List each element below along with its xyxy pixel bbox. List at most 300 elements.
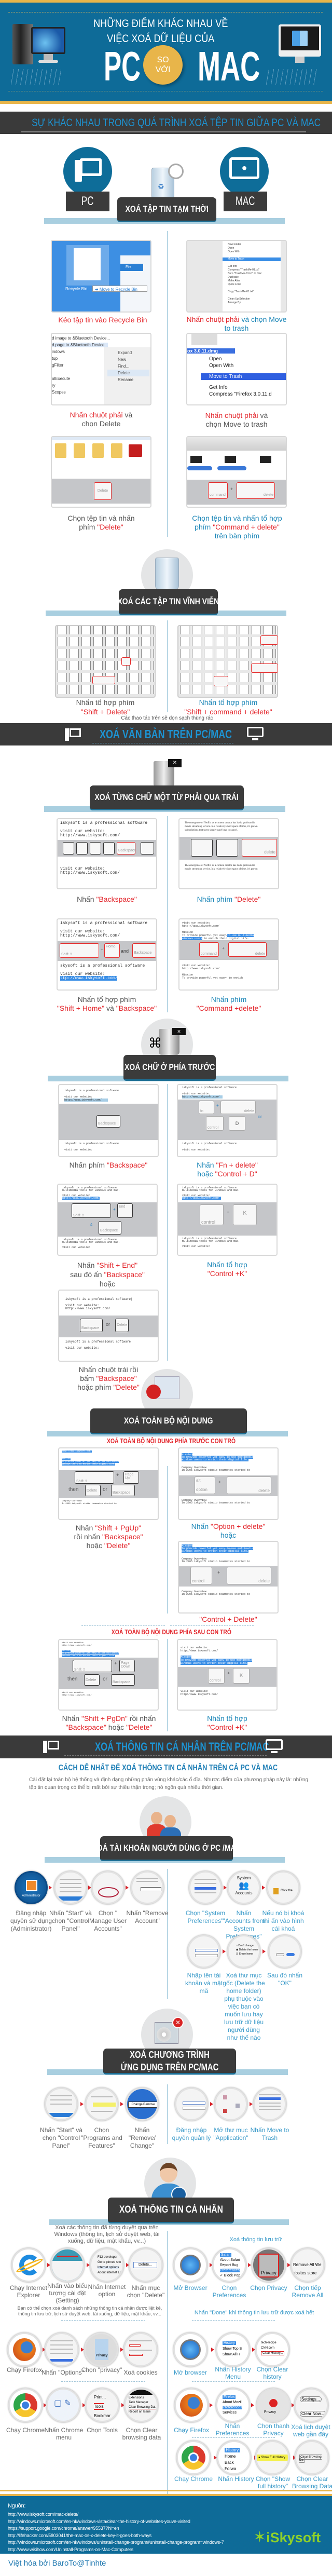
panel: control+delete: Company Overview bbox=[182, 1590, 206, 1593]
panel: control+K after bbox=[177, 1639, 278, 1711]
steps: Chrome on Mac: Chọn Clear Browsing Data bbox=[292, 2475, 332, 2490]
panel: shift+pgdn: Shift ⇧ bbox=[74, 1668, 86, 1672]
text: XOÁ CHỮ Ở PHÍA TRƯỚC bbox=[125, 1062, 215, 1072]
steps: Safari history: Show All H bbox=[223, 2353, 240, 2356]
panel: click then backspace/delete: visit our website: bbox=[65, 1304, 99, 1307]
title: MAC: MAC bbox=[198, 43, 260, 89]
heading: temporary file deletion bbox=[44, 218, 285, 224]
panel: fn+delete: + bbox=[216, 1104, 219, 1108]
panel: backspace forward: visit our website: bbox=[64, 1095, 92, 1099]
caption bbox=[76, 698, 134, 716]
text: Safari storage: Xoá thông tin lưu trữ bbox=[230, 2236, 282, 2243]
panel: control+K: multimedia tools for windows and mac. bbox=[182, 1189, 240, 1192]
steps: Chrome on PC: Chọn Clear browsing data bbox=[122, 2426, 161, 2441]
keyboard: PC bbox=[55, 625, 156, 698]
panel: click then backspace/delete: Backspace bbox=[81, 1326, 99, 1330]
caption: "Control + Delete" bbox=[199, 1615, 257, 1623]
steps: Internet Explorer: About Internet Ex bbox=[98, 2271, 121, 2274]
panel: control+K: multimedia tools for windows and mac. bbox=[182, 1240, 240, 1243]
panel: control+delete bbox=[178, 1541, 279, 1614]
steps: Chrome on PC: Task Manager bbox=[129, 2401, 148, 2404]
panel: Mac move to trash menu: Open With bbox=[228, 250, 240, 253]
caption: Nhấn tổ hợp bbox=[207, 1714, 247, 1723]
panel: shift+pgdn: http://www.iskysoft.com/ bbox=[62, 1645, 92, 1647]
steps: Mac user account: Chọn "System Preferences" bbox=[186, 1909, 225, 1924]
panel: shift+home backspace bbox=[57, 918, 157, 991]
panel: shift+pgdn: Backspace bbox=[113, 1680, 130, 1684]
steps: Internet Explorer: Nhấn vào biểu tượng cài đặt (Setting) bbox=[47, 2282, 88, 2304]
caption bbox=[77, 1365, 140, 1391]
caption bbox=[197, 1161, 258, 1178]
panel: control+K after: To provide powerful yet easy-to-use multimedia bbox=[181, 1659, 252, 1662]
panel: control+K: iskysoft is a professional software bbox=[182, 1186, 237, 1189]
panel: control+delete: control bbox=[192, 1579, 204, 1583]
steps: Chrome on PC: Tools bbox=[94, 2404, 104, 2409]
panel: PC drag to recycle bin: File bbox=[126, 265, 131, 269]
steps: Firefox on PC: Chạy Firefox bbox=[7, 2366, 42, 2374]
caption bbox=[191, 1522, 265, 1539]
subheading: after cursor: XOÁ TOÀN BỘ NỘI DUNG PHÍA SAU CON TRỎ bbox=[111, 1628, 231, 1636]
icon: trash with x: ✕ bbox=[173, 760, 177, 766]
panel: Mac move to trash menu: Copy "TrashMe-01.txt" bbox=[228, 290, 254, 293]
panel: Mac move to trash menu: Clean Up Selection bbox=[228, 297, 250, 301]
steps: Safari privacy: ebsites store bbox=[293, 2271, 316, 2275]
panel: option+delete: Company Overview bbox=[182, 1466, 206, 1469]
steps: PC uninstall: Nhấn "Remove/ Change" bbox=[129, 2126, 156, 2149]
panel: shift+pgup: or bbox=[103, 1487, 107, 1493]
icon: PC circle: PC bbox=[81, 194, 94, 208]
steps: Firefox on Mac: Chọn thanh Privacy bbox=[257, 2422, 289, 2437]
panel: PC right-click delete: Expand bbox=[118, 350, 132, 355]
panel: delete mac: subscriptions that users simply can't bear to cancel. bbox=[185, 829, 238, 832]
panel: control+K after: visit our website: bbox=[181, 1646, 209, 1649]
caption: chọn Move to trash bbox=[205, 420, 268, 428]
icon: administrator bbox=[15, 1871, 48, 1904]
logo: iSkysoft: ✶iSkysoft bbox=[253, 2529, 321, 2546]
panel: delete mac: The emergence of Netflix as a content creator has had a profound in bbox=[185, 822, 255, 824]
panel: PC right-click delete: Find... bbox=[118, 364, 129, 369]
panel: PC drag to recycle bin: Recycle Bin bbox=[65, 287, 87, 291]
caption: hoặc phím "Delete" bbox=[77, 1383, 140, 1391]
steps: Safari history: Chọn Clear history bbox=[257, 2366, 288, 2380]
caption: Nhấn "Fn + delete" bbox=[197, 1161, 258, 1169]
caption: hoặc "Control + D" bbox=[197, 1170, 257, 1178]
steps: Chrome on PC: Chọn Tools bbox=[87, 2426, 118, 2434]
text: ỨNG DỤNG TRÊN PC/MAC bbox=[121, 2062, 218, 2072]
icon: trash with x bbox=[154, 759, 182, 785]
panel: shift+end: visit our website: bbox=[62, 1246, 90, 1249]
section bar: file deletion differences bbox=[0, 112, 332, 134]
panel: shift+pgdn: or bbox=[103, 1676, 107, 1682]
panel: backspace bbox=[57, 818, 157, 889]
steps: Safari privacy: Remove All We bbox=[293, 2262, 322, 2267]
panel: fn+delete: fn bbox=[200, 1109, 203, 1113]
steps: Safari privacy: Chọn Preferences bbox=[213, 2284, 246, 2299]
panel: Mac right-click move to trash: ox 3.0.11.dmg bbox=[187, 348, 218, 354]
caption: "Command +delete" bbox=[197, 1004, 261, 1012]
panel: shift+end: multimedia tools for windows and mac. bbox=[62, 1189, 120, 1192]
panel: fn+delete: http://www.iskysoft.com/ bbox=[182, 1095, 219, 1099]
heading: uninstall programs bbox=[47, 2069, 288, 2075]
panel: shift+pgup: Page Up bbox=[125, 1473, 133, 1480]
caption: Nhấn "Shift + End" bbox=[77, 1261, 137, 1269]
steps: PC uninstall: Nhấn "Start" và chọn "Control Panel" bbox=[40, 2126, 82, 2149]
caption: Nhấn phím "Backspace" bbox=[70, 1161, 147, 1169]
steps: Firefox on PC: Chọn "privacy" bbox=[81, 2366, 122, 2374]
steps: Chrome on PC: Chạy Chrome bbox=[6, 2426, 45, 2434]
panel: command+delete: http://www.iskysoft.com/ bbox=[182, 967, 219, 970]
panel: shift+pgup bbox=[58, 1447, 159, 1520]
credit: Việt hóa bởi BaroTo@Tinhte bbox=[8, 2559, 106, 2568]
panel: control+K after: Mission bbox=[181, 1656, 191, 1659]
panel: Mac move to trash menu: Arrange By bbox=[228, 301, 241, 304]
panel: shift+home backspace: ttp://www.iskysoft.com/ bbox=[60, 976, 117, 981]
badge: so với: SO bbox=[157, 56, 169, 64]
panel: option+delete: Mission bbox=[182, 1453, 192, 1456]
steps: Firefox on Mac: Clear Now... bbox=[301, 2411, 324, 2416]
steps: Safari privacy: Safari bbox=[221, 2253, 230, 2257]
panel: option+delete: option bbox=[196, 1487, 208, 1492]
panel: shift+end: + bbox=[113, 1208, 116, 1212]
caption bbox=[207, 1714, 247, 1731]
panel: backspace: visit our website: bbox=[60, 866, 105, 871]
panel: Mac move to trash menu: Move to Trash bbox=[228, 257, 244, 261]
steps: Firefox on Mac: Services bbox=[223, 2411, 237, 2415]
steps: Internet Explorer bbox=[6, 2247, 167, 2309]
panel: option+delete: To provide powerful yet easy-to-use multimedia bbox=[182, 1456, 253, 1459]
caption: Nhấn tổ hợp bbox=[207, 1260, 247, 1269]
steps: Chrome on PC: Clear Browsing Dat bbox=[129, 2406, 156, 2409]
text: XOÁ CHƯƠNG TRÌNH bbox=[130, 2050, 210, 2060]
caption: "Control +K" bbox=[208, 1269, 247, 1278]
panel: control+K: K bbox=[243, 1210, 247, 1216]
panel: shift+home backspace: http://www.iskysoft.com/ bbox=[60, 933, 120, 938]
steps: Mac user account: Nhấn "Accounts from System Preferences" bbox=[223, 1909, 265, 1940]
panel: shift+pgdn: then bbox=[67, 1676, 77, 1682]
panel: PC right-click delete: Scopes bbox=[52, 390, 66, 395]
panel: control+K after: K bbox=[240, 1673, 243, 1678]
panel: fn+delete: visit our website: bbox=[182, 1092, 210, 1095]
panel: backspace: iskysoft is a professional software bbox=[60, 821, 147, 825]
panel: click then backspace/delete: http://www.iskysoft.com/ bbox=[65, 1307, 110, 1310]
steps: Firefox on Mac: About Mozil bbox=[223, 2401, 242, 2404]
panel: PC right-click delete: indows bbox=[52, 349, 65, 354]
caption: Kéo tập tin vào Recycle Bin bbox=[58, 316, 147, 324]
caption: Nhấn chuột phải và bbox=[205, 411, 268, 419]
panel: PC right-click delete: d page to &Bluetooth Device... bbox=[52, 343, 108, 347]
top banner bbox=[0, 0, 332, 104]
panel: backspace forward bbox=[58, 1084, 159, 1157]
panel: command+delete bbox=[178, 918, 279, 991]
panel: fn+delete: visit our website: bbox=[182, 1148, 210, 1151]
panel: backspace: Backspace bbox=[118, 849, 136, 852]
panel: fn+delete: iskysoft is a professional software bbox=[182, 1142, 237, 1145]
steps: Firefox on Mac: Firefox bbox=[224, 2395, 234, 2399]
note: Nhấn "Done" khi thông tin lưu trữ được xoá hết bbox=[195, 2310, 314, 2316]
panel: fn+delete: control bbox=[208, 1126, 218, 1130]
panel: PC select and press delete bbox=[51, 436, 151, 508]
panel: command+delete: Mission bbox=[182, 973, 193, 977]
text: XOÁ TÀI KHOẢN NGƯỜI DÙNG Ở PC /MAC bbox=[92, 1843, 241, 1853]
panel: Mac right-click move to trash bbox=[186, 333, 287, 405]
caption: "Backspace" hoặc "Delete" bbox=[65, 1723, 152, 1731]
panel: shift+pgup: Company Overview bbox=[62, 1471, 81, 1473]
panel: backspace: http://www.iskysoft.com/ bbox=[60, 833, 120, 838]
panel: PC right-click delete: d image to &Bluetooth Device... bbox=[52, 336, 110, 341]
footer: sources bbox=[0, 2490, 332, 2491]
panel: shift+home backspace: visit our website: bbox=[60, 929, 105, 934]
steps: Internet Explorer: Delete... bbox=[139, 2263, 152, 2267]
panel: shift+end: iskysoft is a professional software bbox=[62, 1238, 117, 1241]
panel: fn+delete bbox=[177, 1084, 278, 1157]
panel: PC right-click delete: Rename bbox=[118, 377, 133, 382]
steps: PC uninstall: Change/Remove bbox=[131, 2103, 155, 2106]
panel: shift+end: visit our website: bbox=[62, 1194, 90, 1197]
panel: fn+delete: D bbox=[236, 1121, 239, 1126]
icon: recycle bin with clock bbox=[151, 164, 184, 197]
steps: Internet Explorer: Nhấn mục chọn "Delete" bbox=[127, 2284, 164, 2299]
title: VIỆC XOÁ DỮ LIỆU CỦA bbox=[107, 33, 215, 45]
caption: Chọn tệp tin và nhấn bbox=[67, 514, 135, 522]
caption bbox=[70, 1261, 145, 1288]
panel: shift+home backspace: and bbox=[121, 948, 129, 954]
caption: Chọn tệp tin và nhấn tổ hợp bbox=[192, 514, 282, 522]
panel: shift+pgdn: Mission bbox=[62, 1650, 71, 1652]
panel: shift+pgup: In 2005 iskysoft studio teammates started to bbox=[62, 1503, 117, 1505]
steps: Safari privacy: Preferences bbox=[220, 2269, 240, 2272]
steps: Firefox on Mac bbox=[171, 2387, 332, 2441]
steps: Mac user account: Xoá thư mục gốc (Delete the home folder) phụ thuộc vào việc bạn có muốn lưu hay lưu trữ dữ liệu người dùng như thế nào bbox=[223, 1972, 265, 2041]
panel: control+delete: windows users to enrich their digital life. bbox=[182, 1550, 248, 1553]
caption: "Shift + Home" và "Backspace" bbox=[57, 1004, 157, 1012]
icon: trash with command symbol: ✕ bbox=[177, 1029, 181, 1034]
panel: control+delete: To provide powerful yet easy-to-use multimedia bbox=[182, 1547, 253, 1550]
panel: backspace forward: iskysoft is a professional software bbox=[64, 1142, 119, 1145]
caption bbox=[74, 1524, 143, 1550]
panel: shift+pgup: + bbox=[116, 1473, 119, 1478]
panel: shift+pgup: http://www.iskysoft.com/ bbox=[62, 1450, 92, 1453]
steps: Chrome on PC: Bookmar bbox=[94, 2414, 110, 2418]
panel: Mac move to trash menu: Make Alias bbox=[228, 279, 240, 282]
steps: Safari history: History bbox=[224, 2341, 235, 2345]
section bar: personal information: XOÁ THÔNG TIN CÁ NHÂN TRÊN PC/MAC bbox=[95, 1740, 269, 1753]
hatch decoration bbox=[10, 69, 61, 85]
caption: rồi nhấn "Backspace" bbox=[74, 1533, 143, 1541]
steps: Internet Explorer: Chạy Internet Explorer bbox=[10, 2284, 47, 2299]
panel: shift+pgup: Backspace bbox=[113, 1491, 130, 1495]
text: http://www.iskysoft.com/mac-delete/ bbox=[8, 2512, 78, 2517]
steps: Mac user account: ○ Don't change bbox=[236, 1944, 254, 1947]
steps: Internet Explorer: Nhấn Internet option bbox=[88, 2283, 126, 2298]
steps: PC uninstall: Chọn "Programs and Features" bbox=[81, 2126, 122, 2149]
panel: PC drag to recycle bin: ➔ Move to Recycle Bin bbox=[95, 287, 137, 292]
caption bbox=[197, 995, 261, 1012]
steps: Safari history: Show Top S bbox=[223, 2347, 242, 2351]
panel: command+delete: To provide powerful yet easy-to-use multimedia bbox=[182, 934, 254, 937]
panel: click then backspace/delete: or bbox=[106, 1322, 110, 1327]
panel: shift+pgup: Delete bbox=[87, 1489, 97, 1493]
panel: control+K: control bbox=[201, 1219, 215, 1225]
panel: control+K after: http://www.iskysoft.com/ bbox=[181, 1649, 218, 1652]
caption: Nhấn tổ hợp phím bbox=[76, 698, 134, 707]
icon: software removal: ✕ bbox=[175, 2019, 181, 2026]
panel: shift+end: multimedia tools for windows and mac. bbox=[62, 1241, 120, 1244]
text: XOÁ TỪNG CHỮ MỘT TỪ PHẢI QUA TRÁI bbox=[95, 792, 239, 802]
caption bbox=[184, 698, 272, 716]
caption bbox=[62, 1714, 156, 1731]
panel: option+delete: In 2005 iskysoft studio teammates started to bbox=[182, 1469, 250, 1472]
section bar: file deletion differences: SỰ KHÁC NHAU TRONG QUÁ TRÌNH XOÁ TỆP TIN GIỮA PC VÀ MAC bbox=[32, 117, 321, 129]
panel: command+delete: + bbox=[222, 946, 225, 951]
steps: Firefox on Mac: Settings... bbox=[301, 2397, 320, 2402]
panel: fn+delete: delete bbox=[244, 1109, 254, 1113]
steps: Internet Explorer: Go to pinned site bbox=[98, 2261, 121, 2264]
steps: PC user account bbox=[10, 1870, 168, 1932]
panel: PC right-click delete: ry bbox=[52, 383, 56, 388]
panel: option+delete: alt bbox=[196, 1478, 200, 1483]
caption: phím "Delete" bbox=[79, 523, 123, 531]
panel: shift+pgdn: windows users to enrich their digital life. bbox=[62, 1655, 115, 1657]
caption: Nhấn phím bbox=[211, 995, 246, 1004]
panel: PC right-click delete: gFilter bbox=[52, 363, 63, 368]
panel: shift+pgdn bbox=[58, 1639, 159, 1711]
panel: shift+pgup: Shift ⇧ bbox=[76, 1480, 88, 1483]
caption bbox=[205, 411, 268, 428]
caption: "Shift + Delete" bbox=[81, 708, 130, 716]
steps: Chrome on Mac: Home bbox=[225, 2454, 236, 2459]
panel: PC right-click delete: olExecute bbox=[52, 376, 70, 381]
text: http://windows.microsoft.com/en-hk/windows/uninstall-change-program#uninstall-change-program=windows-7 bbox=[8, 2540, 224, 2545]
steps: Safari history bbox=[171, 2332, 301, 2384]
panel: delete mac: movie streaming service. In a relatively short space of time, it's grown bbox=[185, 825, 257, 828]
panel: control+K after: http://www.iskysoft.com/ bbox=[181, 1693, 218, 1696]
steps: Safari privacy: Privacy bbox=[261, 2270, 276, 2275]
steps: Safari privacy: Chọn Privacy bbox=[250, 2284, 287, 2292]
panel: command+delete: command bbox=[201, 952, 217, 956]
panel: control+K after: control bbox=[210, 1679, 220, 1683]
text: https://support.google.com/chrome/answer/95537?hl=en bbox=[8, 2526, 119, 2531]
steps: Mac user account: ☑ Erase home bbox=[236, 1953, 253, 1956]
steps: Mac user account: Nếu nó bị khoá thì ấn vào hình cái khoá bbox=[262, 1909, 304, 1932]
steps: Firefox on Mac: Chạy Firefox bbox=[174, 2426, 209, 2434]
panel: control+delete: In 2005 iskysoft studio teammates started to bbox=[182, 1560, 250, 1563]
panel: control+delete: delete bbox=[258, 1579, 270, 1583]
steps: Mac user account: 👥 bbox=[239, 1881, 249, 1890]
panel: Mac command + delete: delete bbox=[264, 493, 273, 497]
steps: Safari history: Nhấn History Menu bbox=[215, 2366, 251, 2380]
panel: Mac right-click move to trash: Open With bbox=[209, 363, 233, 369]
steps: Firefox on PC: Xoá cookies bbox=[123, 2369, 158, 2376]
icon: trash with command symbol bbox=[141, 1019, 193, 1070]
panel: control+K after: visit our website: bbox=[181, 1690, 209, 1693]
steps: Mac user account bbox=[185, 1870, 304, 2041]
heading: permanent deletion bbox=[46, 611, 286, 616]
panel: control+delete: Mission bbox=[182, 1544, 192, 1548]
panel: shift+pgup: Company Overview bbox=[62, 1500, 81, 1502]
steps: Mac user account: Click the bbox=[281, 1889, 293, 1892]
badge: so với: VỚI bbox=[156, 65, 170, 74]
icon: PC computer bbox=[12, 24, 65, 64]
icon: administrator: Administrator bbox=[22, 1894, 40, 1897]
steps: Chrome on PC bbox=[0, 2387, 166, 2445]
panel: command+delete: http://www.iskysoft.com/ bbox=[182, 925, 219, 928]
subheading: before cursor: XOÁ TOÀN BỘ NỘI DUNG PHÍA TRƯỚC CON TRỎ bbox=[107, 1437, 236, 1445]
subheading: easiest way: CÁCH DỄ NHẤT ĐỂ XOÁ THÔNG TIN CÁ NHÂN TRÊN CẢ PC VÀ MAC bbox=[59, 1764, 278, 1772]
steps: Firefox on PC: Nhấn "Options" bbox=[42, 2369, 84, 2376]
panel: PC drag to recycle bin bbox=[51, 240, 151, 313]
text: XOÁ TẬP TIN TẠM THỜI bbox=[125, 204, 209, 214]
panel: Mac move to trash menu: Open bbox=[228, 247, 234, 250]
caption bbox=[207, 1260, 247, 1278]
panel: shift+end: End bbox=[119, 1205, 125, 1209]
panel: shift+pgdn: visit our website: bbox=[62, 1692, 84, 1694]
heading: delete all content bbox=[47, 1431, 288, 1436]
panel: delete mac: movie streaming service. In a relatively short space of time, it's grown bbox=[185, 868, 257, 871]
panel: control+delete: In 2005 iskysoft studio teammates started to bbox=[182, 1593, 250, 1596]
panel: command+delete: Mission bbox=[182, 931, 193, 934]
steps: Mac uninstall: Nhấn Move to Trash bbox=[251, 2126, 289, 2141]
panel: shift+home backspace: visit our website: bbox=[60, 972, 105, 977]
panel: shift+home backspace: Backspace bbox=[134, 951, 151, 955]
panel: command+delete: visit our website: bbox=[182, 921, 210, 925]
steps: Chrome on PC: Print... bbox=[94, 2395, 106, 2399]
steps: Chrome on Mac: History bbox=[226, 2448, 239, 2452]
icon: MAC circle bbox=[220, 147, 269, 211]
panel: shift+pgdn: http://www.iskysoft.com/ bbox=[62, 1694, 92, 1697]
steps: Firefox on PC bbox=[0, 2332, 166, 2384]
steps: Safari privacy: Chọn tiếp Remove All bbox=[292, 2284, 323, 2299]
panel: Mac right-click move to trash: Move to Trash bbox=[209, 374, 242, 379]
panel: shift+end: http://www.iskysoft.com/ bbox=[62, 1197, 100, 1200]
panel: shift+home backspace: + bbox=[101, 948, 103, 953]
panel: shift+pgup: windows users to enrich their digital life. bbox=[62, 1463, 115, 1466]
steps: Chrome on Mac: Chọn "Show full history" bbox=[256, 2475, 290, 2490]
panel: shift+end: & bbox=[90, 1223, 92, 1227]
icon: Mac computer bbox=[279, 24, 321, 63]
panel: click then backspace/delete: Delete bbox=[117, 1323, 127, 1327]
text: http://lifehacker.com/5803041/the-mac-os-x-delete-key-it-goes-both-ways bbox=[8, 2532, 151, 2538]
text: Nguồn: bbox=[8, 2503, 25, 2509]
text: http://www.wikihow.com/Uninstall-Programs-on-Mac-Computers bbox=[8, 2547, 133, 2552]
steps: Mac user account: Accounts bbox=[236, 1891, 252, 1895]
steps: Mac uninstall bbox=[172, 2086, 289, 2141]
panel: shift+pgdn: + bbox=[114, 1661, 117, 1666]
steps: Chrome on Mac: ● Show Full History bbox=[258, 2456, 285, 2459]
caption: hoặc "Delete" bbox=[87, 1541, 130, 1550]
steps: Firefox on Mac: Privacy bbox=[264, 2410, 276, 2414]
panel: Mac move to trash menu: Duplicate bbox=[228, 276, 239, 279]
caption: Nhấn tổ hợp phím bbox=[78, 995, 136, 1004]
panel: backspace forward: Backspace bbox=[98, 1122, 116, 1126]
panel: option+delete: In 2005 iskysoft studio teammates started to bbox=[182, 1501, 250, 1504]
panel: backspace: visit our website: bbox=[60, 829, 105, 834]
caption bbox=[67, 514, 135, 531]
panel: shift+home backspace: iskysoft is a professional software bbox=[60, 921, 147, 926]
panel: control+K after: windows users to enrich their digital life. bbox=[181, 1662, 247, 1665]
caption: sau đó ấn "Backspace" bbox=[70, 1270, 145, 1279]
panel: shift+pgup: In 2005 iskysoft studio teammates started to bbox=[62, 1474, 117, 1476]
panel: shift+pgdn: Page Down bbox=[121, 1661, 130, 1669]
panel: delete mac: delete bbox=[264, 850, 275, 855]
text: XOÁ CÁC TẬP TIN VĨNH VIỄN bbox=[118, 596, 219, 606]
section bar: text deletion bbox=[0, 723, 332, 745]
icon: PC circle bbox=[63, 147, 112, 211]
text: http://windows.microsoft.com/en-hk/windows-vista/clear-the-history-of-websites-youve-visited bbox=[8, 2519, 190, 2524]
icon: MAC circle: ● bbox=[242, 162, 247, 173]
steps: PC uninstall bbox=[40, 2086, 160, 2149]
icon: trash with command symbol: ⌘ bbox=[148, 1035, 162, 1051]
icon: mac bbox=[266, 1739, 283, 1753]
